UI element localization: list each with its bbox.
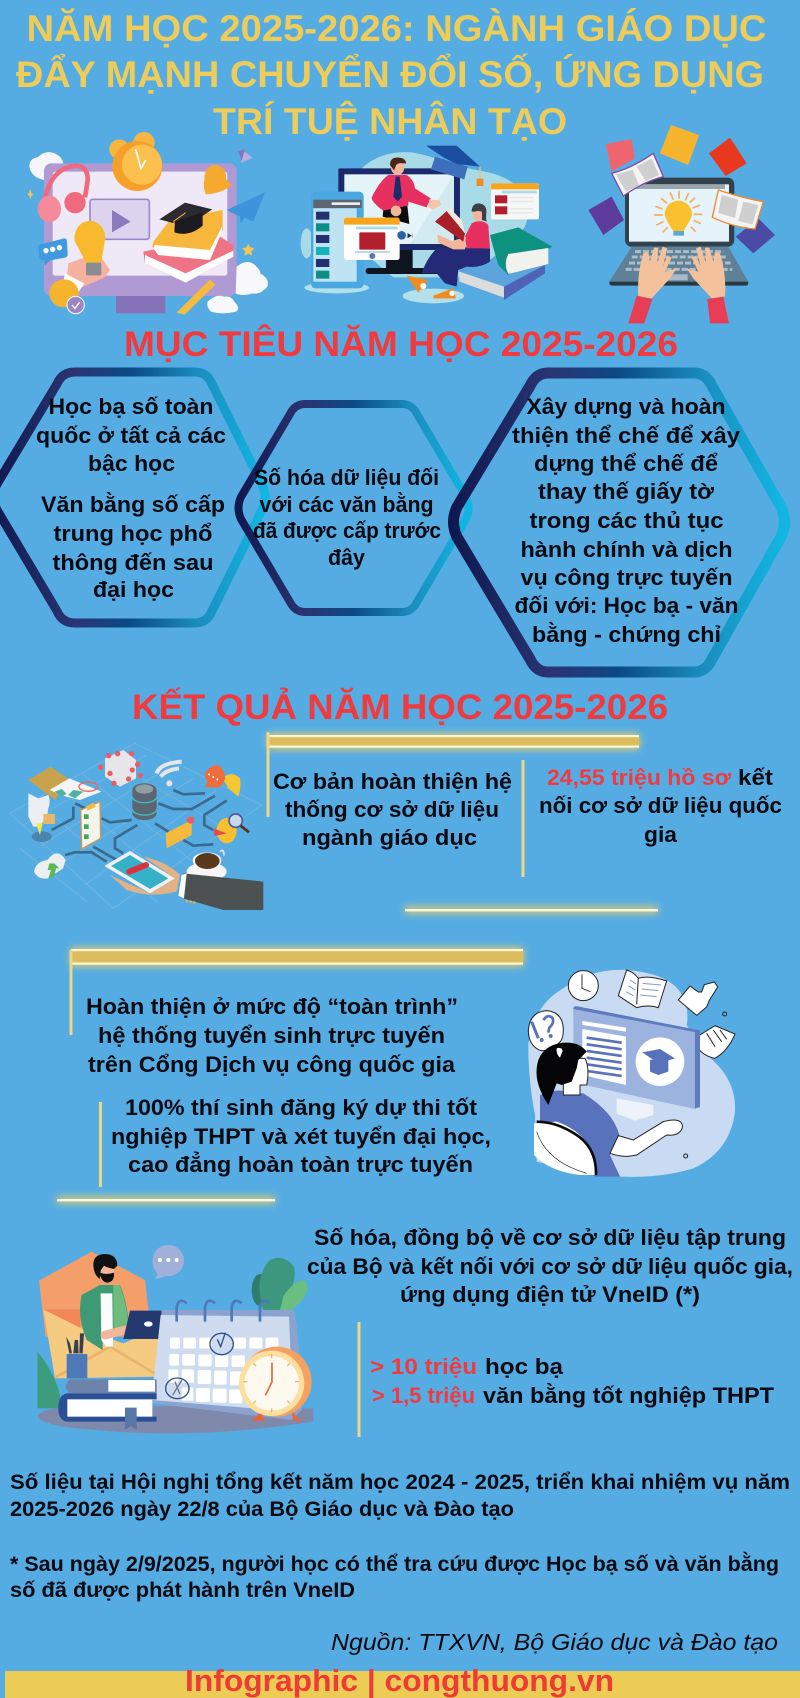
decoration: gold frame, results 1 (266, 732, 639, 817)
hexagon: digital records: Văn bằng số cấp (41, 492, 225, 517)
hexagon: digitised diplomas: đây (328, 545, 365, 570)
text: 1.5 million diplomas: > 1,5 triệu (372, 1383, 475, 1408)
text: database: ngành giáo dục (302, 825, 477, 850)
note: data origin: 2025-2026 ngày 22/8 của Bộ Giáo dục và Đào tạo (10, 1498, 514, 1521)
text: 100 percent online: nghiệp THPT và xét tuyển đại học, (111, 1124, 491, 1149)
hexagon: institutions: dựng thể chế để (534, 451, 718, 476)
text: digitisation: của Bộ và kết nối với cơ sở dữ liệu quốc gia, (307, 1254, 793, 1279)
divider: vertical gold (522, 760, 524, 877)
text: 1.5 million diplomas: văn bằng tốt nghiệp THPT (483, 1383, 774, 1408)
illustration: man with envelope, calendar and clock (37, 1245, 313, 1434)
text: 100 percent online (111, 1095, 491, 1177)
text: 24.55 million records: gia (644, 822, 677, 847)
hexagon: institutions: đối với: Học bạ - văn (514, 593, 738, 618)
text: 100 percent online: 100% thí sinh đăng ký dự thi tốt (125, 1095, 478, 1120)
heading: objectives: MỤC TIÊU NĂM HỌC 2025-2026 (124, 324, 678, 364)
hexagon: institutions: thay thế giấy tờ (538, 479, 714, 504)
text: digitisation (307, 1225, 793, 1307)
note: VneID lookup (10, 1552, 779, 1602)
text: 10 million records: học bạ (485, 1354, 564, 1379)
hexagon: digital records: thông đến sau (52, 550, 214, 575)
note: VneID lookup: * Sau ngày 2/9/2025, người học có thể tra cứu được Học bạ số và văn bằng (10, 1552, 779, 1576)
illustration: laptop with hands and flying books (588, 125, 775, 323)
hexagon: institutions: Xây dựng và hoàn (526, 394, 726, 419)
hexagon: digital records: Học bạ số toàn (48, 394, 214, 419)
hexagon: institutions (454, 373, 784, 672)
hexagon: digital records (0, 372, 265, 623)
text: database: thống cơ sở dữ liệu (285, 797, 499, 822)
footer bar (5, 1663, 800, 1698)
text: digitisation: Số hóa, đồng bộ về cơ sở dữ liệu tập trung (314, 1225, 786, 1250)
hexagon: institutions: bằng - chứng chỉ (532, 622, 721, 647)
note: VneID lookup: số đã được phát hành trên VneID (10, 1579, 355, 1602)
hexagon: digitised diplomas (238, 404, 468, 612)
title: TRÍ TUỆ NHÂN TẠO (213, 100, 567, 142)
title: ĐẨY MẠNH CHUYỂN ĐỔI SỐ, ỨNG DỤNG (16, 52, 764, 95)
hexagon: institutions: thiện thể chế để xây (512, 423, 741, 448)
text: 24.55 million records: kết (738, 765, 774, 790)
hexagon: digital records: bậc học (88, 451, 175, 476)
note: data origin (10, 1471, 790, 1521)
heading: results: KẾT QUẢ NĂM HỌC 2025-2026 (132, 687, 668, 727)
illustration: computer with clock, graduation cap and books (27, 132, 268, 315)
text: 10 million records: > 10 triệu (370, 1354, 477, 1379)
text: digitisation: ứng dụng điện tử VneID (*) (400, 1282, 700, 1307)
text: database (273, 769, 512, 850)
hexagon: institutions: vụ công trực tuyến (520, 565, 732, 590)
hexagon: digital records: trung học phổ (54, 521, 212, 546)
divider: horizontal gold (405, 907, 658, 913)
hexagon: digital records: quốc ở tất cả các (36, 423, 226, 448)
text: admissions system: trên Cổng Dịch vụ công quốc gia (88, 1052, 455, 1077)
text: 24.55 million records: 24,55 triệu hồ sơ (547, 765, 731, 790)
footer bar: Infographic | congthuong.vn (185, 1663, 614, 1698)
note: data origin: Số liệu tại Hội nghị tổng kết năm học 2024 - 2025, triển khai nhiệm vụ năm (10, 1471, 790, 1494)
text: admissions system: hệ thống tuyển sinh trực tuyến (98, 1023, 445, 1048)
divider: vertical gold 3 (358, 1322, 360, 1437)
text: database: Cơ bản hoàn thiện hệ (273, 769, 512, 794)
decoration: gold frame, results 2 (70, 948, 523, 1035)
hexagon: digital records: đại học (93, 577, 174, 602)
text: 1.5 million diplomas (372, 1383, 774, 1408)
text: 24.55 million records: nối cơ sở dữ liệu quốc (539, 793, 782, 818)
illustration: teacher and student with monitor (301, 146, 552, 303)
divider: vertical gold 2 (99, 1102, 102, 1187)
hexagon: institutions: hành chính và dịch (520, 537, 732, 562)
title (16, 8, 767, 142)
hexagon: digitised diplomas: đã được cấp trước (253, 518, 441, 543)
title: NĂM HỌC 2025-2026: NGÀNH GIÁO DỤC (26, 8, 767, 49)
text: 100 percent online: cao đẳng hoàn toàn trực tuyến (128, 1152, 473, 1177)
text: admissions system: Hoàn thiện ở mức độ “toàn trình” (86, 994, 458, 1019)
text: admissions system (86, 994, 458, 1077)
hexagon: institutions: trong các thủ tục (530, 508, 724, 533)
divider: horizontal gold 2 (57, 1197, 275, 1203)
hexagon: digitised diplomas: với các văn bằng (260, 492, 434, 517)
hexagon: digitised diplomas: Số hóa dữ liệu đối (254, 465, 439, 490)
illustration: isometric data network (10, 743, 263, 910)
text: 24.55 million records (539, 765, 782, 847)
source: Nguồn: TTXVN, Bộ Giáo dục và Đào tạo (331, 1629, 778, 1655)
text: 10 million records (370, 1354, 564, 1379)
illustration: student at a computer (528, 970, 735, 1177)
